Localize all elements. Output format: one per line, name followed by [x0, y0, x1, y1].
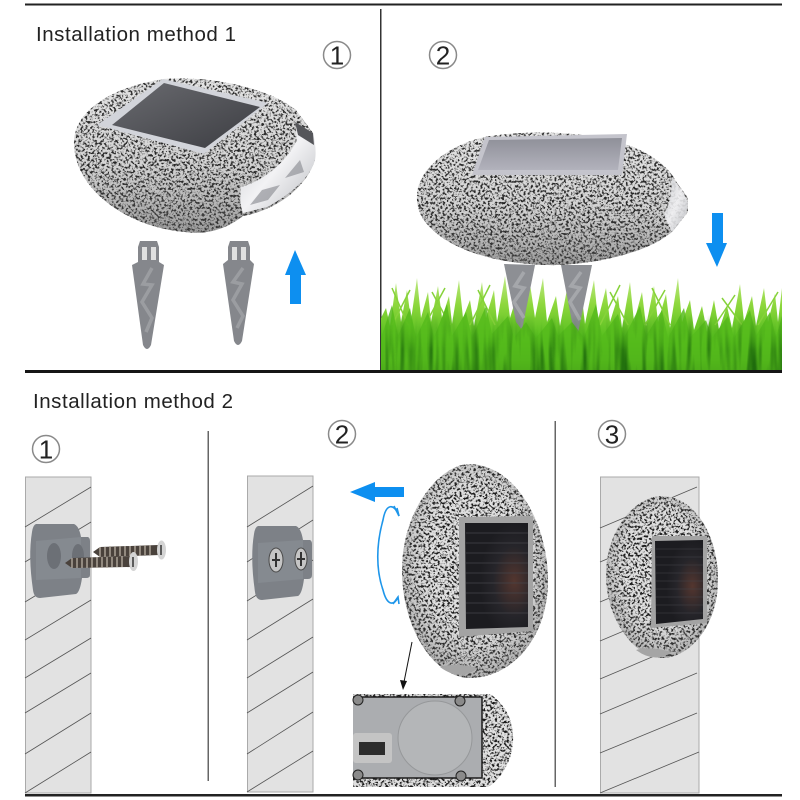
grass streaks — [381, 315, 782, 370]
wall, step 2 — [247, 476, 313, 792]
stone solar light, angled view — [74, 78, 316, 233]
step number 1 (method 2) — [32, 434, 60, 464]
step number 1 (method 2): 1 — [39, 434, 53, 464]
title: installation method 1: Installation method 1 — [36, 23, 236, 46]
stone solar light, front view — [402, 464, 548, 678]
stone solar light mounted on wall — [606, 496, 718, 658]
step number 1 (method 1) — [324, 40, 350, 70]
grass — [381, 264, 782, 372]
step number 3 (method 2): 3 — [605, 420, 619, 450]
title: installation method 2: Installation method 2 — [33, 390, 233, 413]
solar panel, angled — [97, 79, 268, 154]
arrow: to detail view — [400, 642, 412, 690]
step number 3 (method 2) — [598, 420, 626, 450]
wall mount with screws fitted — [252, 526, 312, 600]
vertical divider between method 1 steps — [380, 9, 382, 370]
step number 2 (method 1) — [430, 40, 456, 70]
top frame line — [25, 4, 782, 6]
stone solar light, side view — [417, 133, 688, 265]
clear lens — [240, 122, 316, 213]
front blades — [381, 304, 782, 372]
arrow: up — [285, 250, 306, 304]
step number 2 (method 2) — [328, 420, 356, 450]
ground stake left — [132, 241, 164, 349]
thin crossing blades — [392, 285, 778, 325]
divider between step 1 and 2 — [208, 431, 209, 781]
wall, step 3 — [600, 477, 699, 793]
step number 1 (method 1): 1 — [330, 40, 344, 70]
step number 2 (method 1): 2 — [436, 40, 450, 70]
arrow: down — [706, 213, 727, 267]
arrow: rotate — [378, 506, 399, 604]
stakes inserted in ground — [504, 264, 592, 333]
solar panel on wall — [651, 536, 707, 628]
step number 2 (method 2): 2 — [335, 420, 349, 450]
ground stake right — [223, 241, 254, 345]
wall mount with screw holes — [30, 524, 90, 598]
back blades — [381, 276, 782, 372]
divider between step 2 and 3 — [554, 421, 556, 787]
solar panel, side view — [472, 134, 627, 175]
screws — [65, 540, 166, 571]
power switch — [353, 733, 392, 763]
detail inset: underside of the light — [353, 694, 513, 787]
bottom frame line — [25, 794, 782, 796]
solar panel, front view — [459, 516, 533, 637]
lens, side view — [664, 178, 688, 232]
wall, step 1 — [25, 477, 91, 793]
arrow: left — [350, 482, 404, 502]
section divider line — [25, 370, 782, 373]
